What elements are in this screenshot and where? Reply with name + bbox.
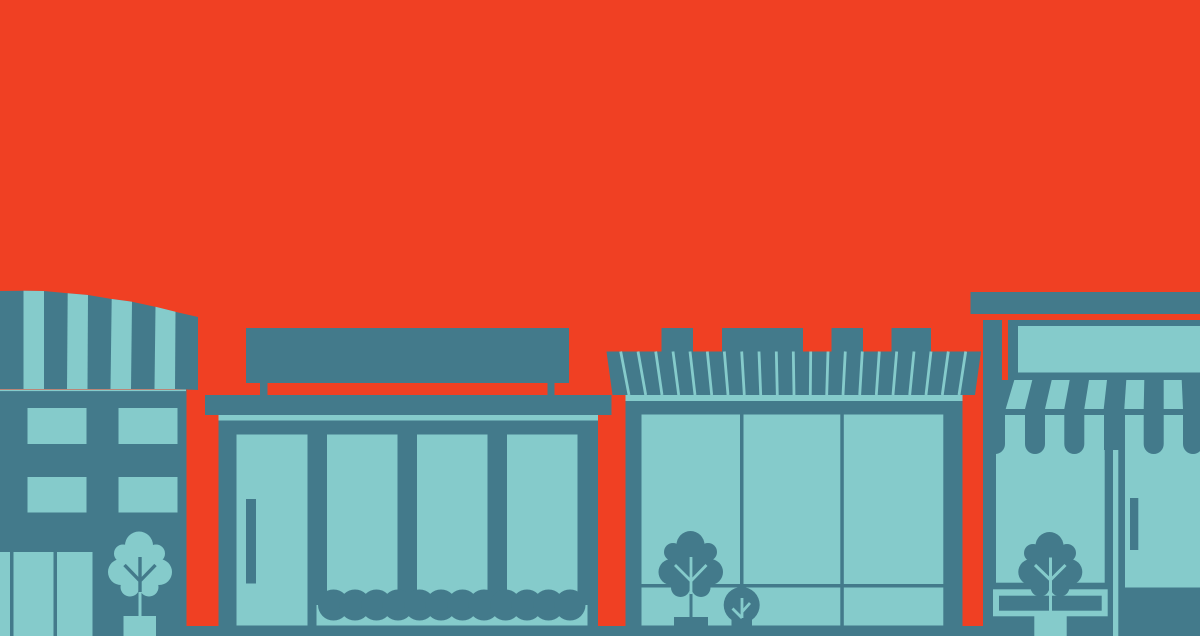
building 3: shop with ribbed awning	[606, 328, 981, 626]
building 1 entrance doors	[0, 552, 92, 636]
building 2 door	[236, 434, 308, 626]
building 3 body	[626, 401, 962, 626]
building 3 roof blocks	[662, 328, 931, 352]
building 2 body	[218, 420, 598, 626]
building 3 ribbed awning	[606, 352, 981, 395]
building 2 scalloped planter	[316, 590, 588, 626]
building 3 light fascia	[626, 395, 962, 401]
building 2 light fascia	[218, 415, 598, 420]
building 4 right door	[1125, 415, 1200, 588]
building 4 awning stripes	[1006, 380, 1183, 409]
building 4 left window	[996, 415, 1105, 583]
building 4 sign panel	[1018, 326, 1200, 372]
icon: potted tree, building 3	[658, 531, 723, 626]
building 4: corner cafe	[970, 292, 1200, 636]
icon: small round shrub	[724, 587, 760, 626]
building 2 blank sign	[246, 328, 569, 383]
building 4 awning scallops	[985, 415, 1200, 454]
icon: potted tree, building 1	[108, 532, 172, 636]
building 4 window box planter	[993, 589, 1108, 636]
building 1 body	[0, 390, 186, 636]
building 1: striped awning office	[0, 291, 198, 636]
building 1 striped awning	[0, 291, 198, 391]
building 1 upper windows	[28, 408, 178, 512]
building 2: shop with sign	[205, 328, 612, 626]
building 2 sign posts	[260, 383, 554, 395]
building 2 windows	[327, 434, 578, 600]
icon: potted tree, building 4	[1018, 532, 1082, 611]
ground strip	[186, 626, 1200, 636]
building 3 window panes	[642, 414, 943, 626]
building 4 roof bar	[970, 292, 1200, 314]
building 4 door edge strip	[1113, 450, 1118, 636]
building 4 body	[983, 320, 1200, 636]
building 2 roof	[205, 395, 612, 415]
